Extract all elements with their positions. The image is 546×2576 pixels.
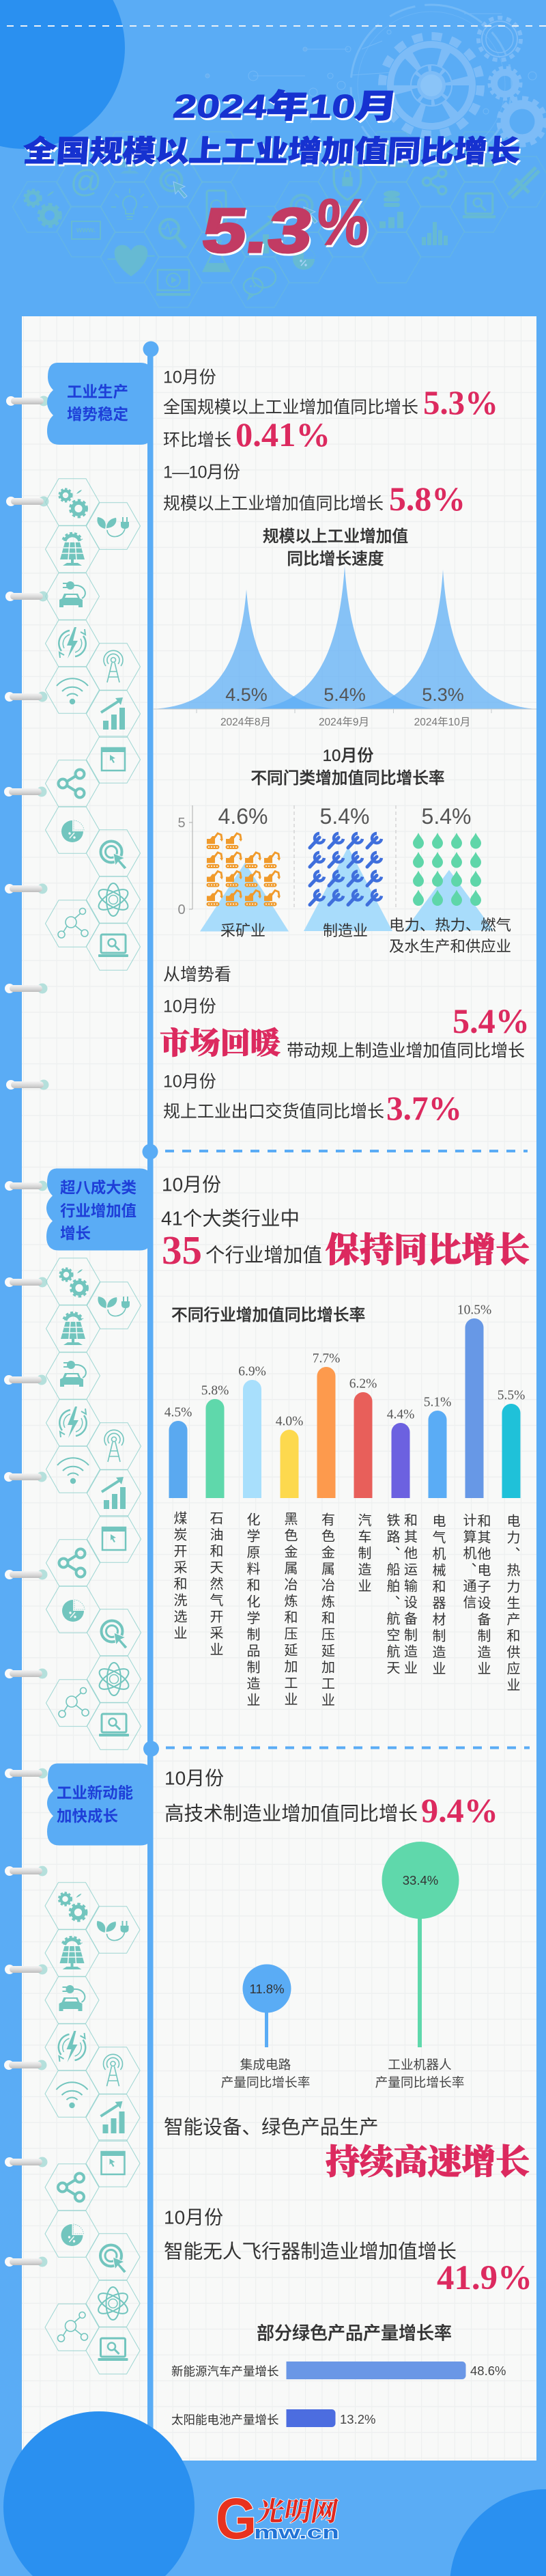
bar chart: growth by industry: 6.2% bbox=[349, 1377, 377, 1391]
text block: growth trends bbox=[160, 965, 530, 1127]
text block: smart and green products: 智能设备、绿色产品生产 bbox=[164, 2116, 379, 2138]
text block: October headline figures: 5.8% bbox=[389, 480, 465, 518]
notebook panel bbox=[22, 316, 536, 2461]
vertical industry labels: 和其他运输设备制造业 bbox=[401, 1513, 418, 1677]
pictogram chart: sector growth: 5 bbox=[177, 816, 186, 831]
vertical industry labels: 黑色金属冶炼和压延加工业 bbox=[282, 1512, 298, 1708]
bar chart heading: 不同行业增加值同比增长率 bbox=[171, 1306, 365, 1325]
chart heading: growth by sector: 10月份 bbox=[323, 747, 373, 765]
lollipop chart: output growth: 工业机器人 bbox=[388, 2058, 452, 2072]
chart heading: year-on-year growth speed: 同比增长速度 bbox=[287, 550, 384, 568]
section tab: new industrial drivers: 加快成长 bbox=[57, 1808, 118, 1825]
bar chart: growth by industry: 4.4% bbox=[387, 1407, 414, 1422]
text block: 35 of 41 industries grew: 35 bbox=[162, 1228, 202, 1273]
chart heading: growth by sector: 不同门类增加值同比增长率 bbox=[250, 769, 445, 788]
notebook binder rings bbox=[4, 396, 49, 2267]
bar chart: growth by industry: 7.7% bbox=[313, 1351, 340, 1366]
text block: 35 of 41 industries grew: 个行业增加值 bbox=[205, 1245, 322, 1266]
section three divider bbox=[143, 1741, 530, 1757]
section one start dot bbox=[143, 342, 158, 357]
horizontal bar chart: green products: 48.6% bbox=[470, 2364, 506, 2378]
text block: growth trends: 从增势看 bbox=[163, 965, 231, 984]
pictogram chart: sector growth: 制造业 bbox=[323, 922, 368, 939]
vertical industry labels: 化学原料和化学制品制造业 bbox=[244, 1512, 260, 1709]
peak chart: monthly growth bbox=[152, 566, 537, 728]
bar chart: growth by industry: 5.5% bbox=[498, 1388, 525, 1403]
section tab: major industries bbox=[46, 1168, 148, 1250]
pictogram chart: sector growth bbox=[177, 804, 511, 955]
text block: 35 of 41 industries grew: 保持同比增长 bbox=[326, 1231, 530, 1269]
vertical industry labels: 计算机、通信 bbox=[461, 1513, 476, 1611]
icons: excavators bbox=[206, 833, 281, 906]
chart heading: year-on-year growth speed bbox=[263, 527, 408, 568]
title: 2024年10月 bbox=[171, 88, 399, 125]
vertical industry labels: 石油和天然气开采业 bbox=[207, 1511, 223, 1659]
headline figure 5.3%: % bbox=[315, 186, 371, 259]
title bbox=[22, 88, 521, 168]
section tab: new industrial drivers: 工业新动能 bbox=[57, 1784, 133, 1802]
bar chart: growth by industry: 6.9% bbox=[238, 1365, 266, 1379]
chart heading: growth by sector bbox=[250, 747, 445, 788]
text block: October headline figures: 1—10月份 bbox=[163, 463, 240, 482]
timeline spine bbox=[147, 345, 153, 2461]
text block: growth trends: 带动规上制造业增加值同比增长 bbox=[287, 1041, 525, 1060]
text block: smart and green products: 智能无人飞行器制造业增加值增长 bbox=[164, 2241, 457, 2262]
bar chart: growth by industry: 10.5% bbox=[457, 1303, 491, 1317]
horizontal bar chart: green products bbox=[171, 2362, 506, 2427]
hexagon icon column: section two bbox=[46, 1258, 141, 1749]
vertical industry labels bbox=[171, 1511, 520, 1709]
icons: water drops bbox=[413, 833, 481, 906]
section tab: industrial production: 增势稳定 bbox=[67, 406, 128, 424]
text block: growth trends: 10月份 bbox=[163, 1072, 216, 1092]
text block: growth trends: 10月份 bbox=[163, 997, 216, 1016]
chart heading: year-on-year growth speed: 规模以上工业增加值 bbox=[263, 527, 408, 546]
section tab: new industrial drivers bbox=[47, 1764, 149, 1846]
text block: 35 of 41 industries grew bbox=[161, 1174, 530, 1273]
text block: smart and green products: 持续高速增长 bbox=[326, 2143, 530, 2181]
vertical industry labels: 汽车制造业 bbox=[356, 1513, 371, 1595]
text block: growth trends: 5.4% bbox=[452, 1003, 530, 1041]
headline figure 5.3% bbox=[198, 186, 371, 266]
vertical industry labels: 有色金属冶炼和压延加工业 bbox=[319, 1512, 334, 1709]
pictogram chart: sector growth: 采矿业 bbox=[220, 922, 265, 939]
text block: smart and green products: 41.9% bbox=[437, 2259, 532, 2297]
hexagon icon column: section three bbox=[45, 1883, 140, 2374]
vertical industry labels: 铁路、船舶、航空航天 bbox=[384, 1513, 400, 1677]
peak chart: monthly growth: 2024年9月 bbox=[319, 716, 369, 728]
decorative bottom-left circle bbox=[3, 2411, 195, 2576]
text block: October headline figures: 0.41% bbox=[235, 415, 330, 454]
pictogram chart: sector growth: 4.6% bbox=[218, 804, 268, 829]
bar chart: growth by industry: 5.8% bbox=[201, 1384, 229, 1398]
text block: smart and green products: 10月份 bbox=[164, 2206, 223, 2228]
bar chart: growth by industry: 5.1% bbox=[424, 1395, 451, 1410]
vertical industry labels: 电力、热力生产和供应业 bbox=[504, 1514, 520, 1694]
text block: October headline figures: 环比增长 bbox=[163, 430, 231, 449]
hexagon icon column: section one bbox=[45, 479, 141, 970]
peak chart: monthly growth: 4.5% bbox=[225, 684, 268, 705]
headline figure 5.3%: 5.3 bbox=[198, 195, 317, 266]
logo: Guangming Online: G bbox=[216, 2487, 257, 2551]
section tab: industrial production: 工业生产 bbox=[67, 384, 128, 400]
peak chart: monthly growth: 2024年10月 bbox=[414, 716, 470, 728]
vertical industry labels: 煤炭开采和洗选业 bbox=[171, 1511, 187, 1642]
vertical industry labels: 和其他电子设备制造业 bbox=[475, 1514, 491, 1678]
peak chart: monthly growth: 5.3% bbox=[422, 684, 464, 705]
logo: Guangming Online: mw.cn bbox=[254, 2522, 339, 2543]
text block: growth trends: 市场回暖 bbox=[160, 1026, 281, 1060]
lollipop chart: output growth: 产量同比增长率 bbox=[221, 2075, 310, 2090]
pictogram chart: sector growth: 电力、热力、燃气 bbox=[389, 917, 511, 934]
horizontal bar chart: green products: 新能源汽车产量增长 bbox=[171, 2365, 278, 2379]
lollipop chart: output growth: 集成电路 bbox=[240, 2058, 291, 2072]
hero gears and circuit motif bbox=[205, 5, 545, 166]
text block: high-tech manufacturing: 10月份 bbox=[164, 1768, 224, 1788]
text block: October headline figures bbox=[163, 368, 498, 518]
vertical industry labels: 电气机械和器材制造业 bbox=[430, 1514, 446, 1678]
text block: October headline figures: 规模以上工业增加值同比增长 bbox=[163, 495, 384, 514]
text block: smart and green products bbox=[164, 2116, 532, 2297]
text block: October headline figures: 10月份 bbox=[163, 368, 216, 387]
peak chart: monthly growth: 5.4% bbox=[324, 684, 366, 705]
lollipop chart: output growth bbox=[221, 1842, 464, 2090]
text block: 35 of 41 industries grew: 41个大类行业中 bbox=[161, 1208, 300, 1230]
text block: 35 of 41 industries grew: 10月份 bbox=[162, 1174, 221, 1195]
text block: October headline figures: 5.3% bbox=[423, 383, 498, 421]
bar chart: growth by industry: 4.5% bbox=[164, 1406, 192, 1419]
text block: high-tech manufacturing: 高技术制造业增加值同比增长 bbox=[164, 1803, 418, 1825]
section tab: major industries: 行业增加值 bbox=[60, 1202, 136, 1220]
section two divider bbox=[142, 1144, 528, 1160]
logo: Guangming Online: 光明网 bbox=[255, 2497, 341, 2527]
bar chart: growth by industry: 4.0% bbox=[276, 1414, 303, 1429]
text block: high-tech manufacturing bbox=[164, 1768, 498, 1829]
pictogram chart: sector growth: 0 bbox=[177, 902, 186, 917]
lollipop chart: output growth: 33.4% bbox=[403, 1873, 438, 1887]
horizontal bar chart: green products: 13.2% bbox=[340, 2412, 375, 2426]
logo: Guangming Online bbox=[216, 2487, 341, 2551]
bar chart: growth by industry bbox=[164, 1303, 525, 1498]
icons: wrenches bbox=[310, 833, 382, 904]
section tab: industrial production bbox=[47, 363, 149, 445]
pictogram chart: sector growth: 5.4% bbox=[422, 804, 471, 829]
hero hexagon pattern with icons bbox=[12, 132, 546, 307]
lollipop chart: output growth: 产量同比增长率 bbox=[375, 2075, 464, 2090]
pictogram chart: sector growth: 5.4% bbox=[320, 804, 369, 829]
hero hexagon pattern with icons: www. bbox=[76, 226, 96, 234]
section tab: major industries: 增长 bbox=[60, 1225, 91, 1242]
lollipop chart: output growth: 11.8% bbox=[249, 1982, 285, 1996]
text block: growth trends: 规上工业出口交货值同比增长 bbox=[163, 1103, 384, 1122]
section tab: major industries: 超八成大类 bbox=[60, 1179, 136, 1197]
decorative bottom-right circle bbox=[450, 2489, 546, 2576]
text block: October headline figures: 全国规模以上工业增加值同比增长 bbox=[163, 398, 418, 417]
decorative top-left circle bbox=[0, 0, 125, 149]
hero hexagon pattern with icons: @ bbox=[70, 163, 102, 199]
dashed line across the header bbox=[7, 25, 546, 27]
chart heading: green product output: 部分绿色产品产量增长率 bbox=[257, 2323, 452, 2343]
pictogram chart: sector growth: 及水生产和供应业 bbox=[389, 938, 511, 955]
peak chart: monthly growth: 2024年8月 bbox=[220, 716, 271, 728]
text block: growth trends: 3.7% bbox=[386, 1089, 462, 1127]
text block: high-tech manufacturing: 9.4% bbox=[421, 1791, 498, 1829]
title: 全国规模以上工业增加值同比增长 bbox=[22, 135, 521, 168]
horizontal bar chart: green products: 太阳能电池产量增长 bbox=[171, 2413, 278, 2426]
